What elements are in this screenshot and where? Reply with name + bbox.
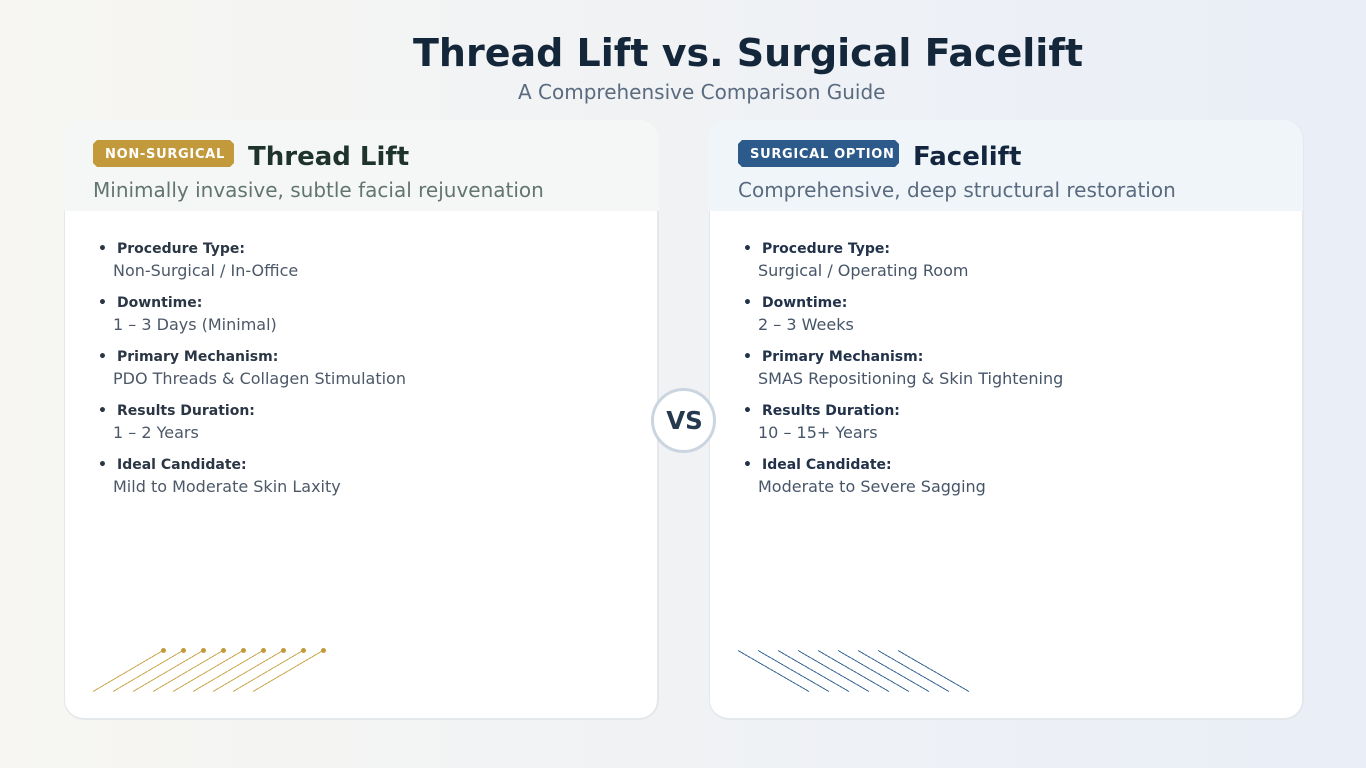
list: thread lift details: Procedure Type: [117,241,245,257]
list: thread lift details: • [98,241,107,257]
list: thread lift details: Ideal Candidate: [117,457,247,473]
list: facelift details: 2 – 3 Weeks [758,315,854,334]
list: thread lift details: Results Duration: [117,403,255,419]
list: thread lift details: 1 – 3 Days (Minimal) [113,315,277,334]
list: facelift details: • [743,403,752,419]
panel: thread lift [64,120,659,720]
list: thread lift details: Mild to Moderate Skin Laxity [113,477,341,496]
list: thread lift details [98,241,406,496]
vs badge [651,388,716,453]
list: thread lift details: • [98,295,107,311]
subtitle: A Comprehensive Comparison Guide [518,80,885,104]
list: thread lift details: Primary Mechanism: [117,349,278,365]
illustration: threads with anchors [93,648,326,692]
text: facelift summary: Comprehensive, deep structural restoration [738,178,1176,202]
list: thread lift details: • [98,349,107,365]
list: thread lift details: PDO Threads & Collagen Stimulation [113,369,406,388]
title: Thread Lift vs. Surgical Facelift [413,31,1083,75]
list: thread lift details: Non-Surgical / In-Office [113,261,298,280]
badge: non-surgical: NON-SURGICAL [105,147,225,162]
vs badge: VS [666,406,703,435]
list: thread lift details: 1 – 2 Years [113,423,199,442]
badge: surgical option [738,140,899,167]
illustration: surgical lines [738,650,969,692]
list: thread lift details: • [98,403,107,419]
heading: thread lift: Thread Lift [248,142,409,172]
list: facelift details: • [743,457,752,473]
list: thread lift details: Downtime: [117,295,202,311]
list: facelift details: Ideal Candidate: [762,457,892,473]
list: facelift details: • [743,241,752,257]
list: facelift details [743,241,1063,496]
list: facelift details: Primary Mechanism: [762,349,923,365]
list: facelift details: 10 – 15+ Years [758,423,878,442]
list: facelift details: • [743,349,752,365]
text: thread lift summary: Minimally invasive, subtle facial rejuvenation [93,178,544,202]
badge: non-surgical [93,140,234,167]
list: thread lift details: • [98,457,107,473]
list: facelift details: Downtime: [762,295,847,311]
list: facelift details: SMAS Repositioning & Skin Tightening [758,369,1063,388]
list: facelift details: • [743,295,752,311]
panel: facelift [708,120,1304,720]
badge: surgical option: SURGICAL OPTION [750,147,895,162]
list: facelift details: Procedure Type: [762,241,890,257]
list: facelift details: Moderate to Severe Sagging [758,477,986,496]
list: facelift details: Results Duration: [762,403,900,419]
heading: facelift: Facelift [913,142,1021,172]
list: facelift details: Surgical / Operating Room [758,261,968,280]
